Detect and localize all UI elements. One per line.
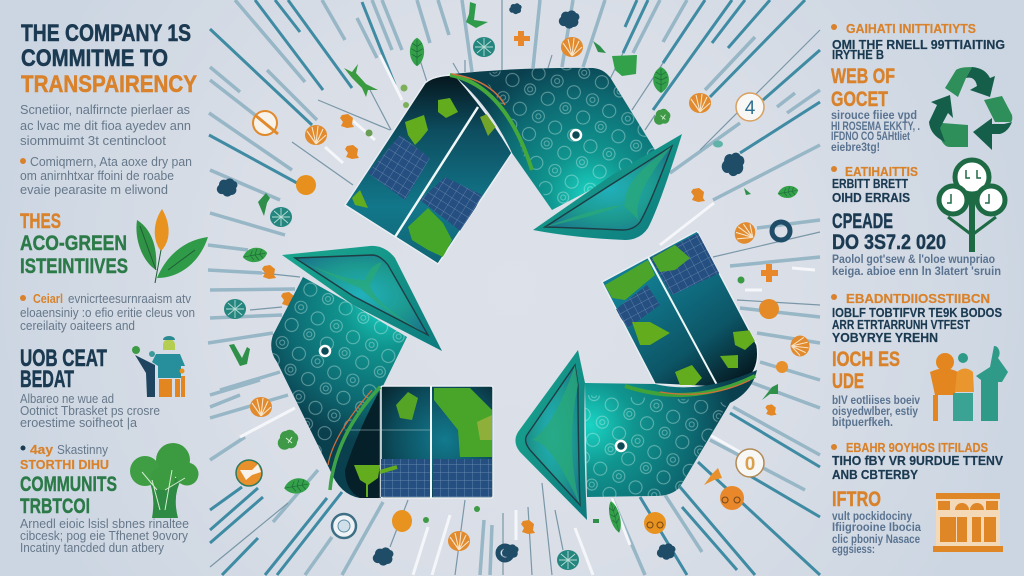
- section 1 heading: OMI THF RNELL 99TTIAITING: [832, 38, 1005, 52]
- intro text: [20, 103, 191, 148]
- bullet text 2: evnicrteesurnraaism atv: [68, 292, 192, 306]
- icon: teal shell: [270, 207, 292, 227]
- ring-patterned ribbon: [450, 68, 655, 210]
- section 4 title: IFTRO: [832, 487, 881, 511]
- section 1 body: eiebre3tg!: [831, 142, 880, 154]
- icon: recycling arrows: [929, 67, 1012, 150]
- section 1 body: sirouce fiiee vpd: [831, 110, 917, 122]
- icon: navy bottom: [502, 544, 519, 559]
- solar panel fold: [345, 75, 512, 264]
- icon: orange blob: [340, 114, 354, 128]
- icon: orange circle: [296, 175, 316, 195]
- icon: orange shell bottom: [448, 531, 470, 551]
- icon: green sprig: [258, 193, 270, 216]
- icon: green leaf top: [410, 38, 424, 66]
- section 2 heading: ERBITT BRETT: [832, 177, 908, 191]
- ring-patterned ribbon: [271, 277, 407, 498]
- icon: green leaf lower right: [762, 384, 778, 400]
- icon: person at podium: [132, 336, 185, 397]
- icon: navy badge: [332, 514, 356, 538]
- solar panel fold: [328, 386, 493, 498]
- section 4 body: clic pboniy Nasace: [832, 534, 920, 546]
- body text 3: [20, 392, 160, 430]
- section 2 title: [832, 209, 946, 254]
- section 2 title: CPEADE: [832, 209, 893, 233]
- icon: green dot: [366, 130, 372, 136]
- icon: navy glyph: [559, 10, 579, 29]
- icon: small green tree: [654, 109, 670, 125]
- icon: green ribbon: [612, 55, 637, 76]
- recycling symbol: [271, 68, 758, 520]
- icon: orange blob lower right: [765, 404, 777, 416]
- icon: tiny sprig: [744, 188, 751, 195]
- right column: [831, 22, 1012, 556]
- body text 3: eroestime soifheot |a: [20, 416, 137, 430]
- section 3 title: UDE: [832, 369, 864, 393]
- icon: green tree left lower: [278, 430, 298, 450]
- body text 4: Incatiny tancded dun atbery: [20, 541, 165, 555]
- bullet heading: [20, 443, 109, 472]
- eco-green heading: [20, 209, 128, 278]
- section 1 body: HI ROSEMA EKKTY, .: [831, 121, 920, 133]
- section 4 body: vult pockidociny: [832, 511, 913, 523]
- bullet heading: 4ay: [30, 443, 53, 457]
- icon: orange shell right: [689, 93, 711, 113]
- icon: teal shell top: [473, 37, 495, 57]
- section 1 title: [831, 64, 895, 111]
- section 3 title: [832, 347, 900, 393]
- icon: tree: [130, 443, 198, 518]
- section 3 title: IOCH ES: [832, 347, 900, 371]
- section 1 body: IFDNO CO 5AHtIiet: [831, 131, 910, 143]
- icon: orange shell lower right: [790, 336, 810, 356]
- icon: green leaf left: [242, 246, 268, 264]
- icon: navy top: [509, 3, 522, 14]
- icon: orange blob upper right: [691, 188, 705, 202]
- title: COMMITME TO: [21, 45, 168, 72]
- icon: number badge 4: [736, 93, 764, 121]
- title: [21, 20, 197, 98]
- solar panel fold: [602, 231, 758, 388]
- icon: leaves: [136, 209, 208, 283]
- arrowhead: [515, 350, 587, 520]
- icon: teal shell bottom: [557, 550, 579, 570]
- icon: teal shell left: [224, 299, 246, 319]
- icon: green leaf lower: [606, 500, 624, 534]
- scattered icons around the symbol: [217, 2, 810, 570]
- section 2 heading: [831, 165, 918, 205]
- body text 3: Albareo ne wue ad: [20, 392, 114, 406]
- icon: small green sprig: [593, 41, 606, 53]
- eco-green heading: ISTEINTIIVES: [20, 254, 128, 278]
- icon: navy scroll: [722, 153, 744, 176]
- icon: green bird: [466, 2, 488, 28]
- icon: orange ring badge: [236, 460, 262, 486]
- heading: community: TRBTCOI: [20, 494, 90, 518]
- intro text: ac lvac me dit fioa ayedev ann: [20, 119, 191, 133]
- section 3 heading: IOBLF TOBTIFVR TE9K BODOS: [832, 306, 1002, 320]
- section 4 heading: EBAHR 9OYHOS ITFILADS: [846, 441, 988, 455]
- section 3 heading: EBADNTDIIOSSTIIBCN: [846, 292, 990, 306]
- icon: classical building: [933, 493, 1003, 552]
- icon: number badge 4: 4: [745, 98, 756, 119]
- section 3 body: bIV eotliises boeiv: [832, 395, 921, 407]
- heading: uob ceat: BEDAT: [20, 366, 74, 393]
- bullet text 2: Ceiarl: [33, 292, 63, 306]
- body text 4: Arnedl eioic lsisl sbnes rinaltee: [20, 517, 189, 531]
- icon: green leaf right: [653, 67, 669, 93]
- section 4 heading: TIHO fBY VR 9URDUE TTENV: [832, 454, 1004, 468]
- icon: orange leaf bottom: [392, 510, 412, 532]
- ring-patterned ribbon: [585, 370, 757, 497]
- bullet text 2: [20, 292, 195, 333]
- left segment: [271, 246, 493, 498]
- arrowhead: [282, 246, 442, 351]
- icon: small green lower: [593, 519, 599, 523]
- section 1 heading: IRYTHE B: [832, 48, 884, 62]
- icon: orange blob small: [345, 145, 359, 159]
- section 1 body: [831, 110, 920, 154]
- section 2 title: DO 3S7.2 020: [832, 230, 946, 254]
- section 3 body: bitpuerfkeh.: [832, 417, 893, 429]
- bullet heading: STORTHI DIHU: [20, 458, 109, 472]
- icon: orange blob left: [262, 265, 276, 279]
- bullet heading: Skastinny: [57, 443, 109, 457]
- icon: orange face lower: [644, 512, 666, 534]
- icon: orange plus right: [761, 264, 778, 282]
- icon: navy ring bottom: [498, 546, 512, 560]
- bullet text: [20, 155, 192, 197]
- top segment: [345, 68, 682, 264]
- section 4 heading: [831, 441, 1004, 482]
- bullet text: Comiqmern, Ata aoxe dry pan: [30, 155, 192, 169]
- icon: green squiggle: [344, 64, 378, 97]
- bullet text: om anirnhtxar ffoini de roabe: [20, 169, 174, 183]
- section 2 heading: OIHD ERRAIS: [832, 191, 910, 205]
- section 4 body: eggsiess:: [832, 544, 875, 556]
- icon: three people: [930, 346, 1008, 421]
- section 2 body: keiga. abioe enn ln 3latert 'sruin: [832, 266, 1001, 278]
- section 1 heading: [831, 22, 1005, 62]
- icon: clock tree: [939, 160, 1005, 252]
- heading: community: [20, 472, 117, 518]
- body text 4: [20, 517, 189, 555]
- heading: uob ceat: [20, 345, 107, 393]
- section 2 body: [832, 254, 1001, 278]
- icon: small green dots: [400, 84, 409, 108]
- section 4 heading: ANB CBTERBY: [832, 468, 919, 482]
- section 3 heading: ARR ETRTARRUNH VTFEST: [832, 318, 970, 332]
- section 1 title: WEB OF: [831, 64, 895, 88]
- radiating rays: [208, 0, 820, 575]
- title: THE COMPANY 1S: [21, 20, 191, 47]
- body text 3: Ootnict Tbrasket ps crosre: [20, 404, 160, 418]
- icon: small green dots bottom: [423, 506, 480, 523]
- icon: navy squiggle: [217, 178, 237, 197]
- icon: orange shell: [305, 125, 327, 145]
- eco-green heading: ACO-GREEN: [20, 231, 127, 255]
- bullet text 2: cereilaity oaiteers and: [20, 319, 135, 333]
- section 3 heading: YOBYRYE YREHN: [832, 331, 938, 345]
- icon: navy blob lower: [657, 543, 675, 560]
- title: TRANSPAIRENCY: [21, 71, 197, 98]
- section 1 heading: GAIHATI INITTIATIYTS: [846, 22, 976, 36]
- icon: orange ring: [253, 111, 278, 135]
- bullet text: evaie pearasite m eliwond: [20, 183, 168, 197]
- right segment: [515, 231, 758, 520]
- icon: navy ring: [772, 222, 790, 240]
- section 3 body: oisyedwlber, estiy: [832, 406, 919, 418]
- section 4 body: [832, 511, 922, 556]
- section 4 body: Ifiigrooine Ibocia: [832, 522, 922, 534]
- icon: orange dot: [776, 361, 788, 373]
- intro text: Scnetiior, nalfirncte pierlaer as: [20, 103, 190, 117]
- icon: small teal: [713, 140, 723, 148]
- icon: orange plus: [514, 31, 530, 46]
- icon: orange shell right: [731, 218, 759, 248]
- heading: community: COMMUNITS: [20, 472, 117, 496]
- icon: orange blob bottom: [521, 520, 535, 534]
- icon: orange shell top: [561, 37, 583, 57]
- icon: number badge 0: [736, 449, 764, 477]
- section 3 heading: [831, 292, 1002, 345]
- icon: orange sprig: [704, 468, 722, 485]
- icon: number badge 0: 0: [745, 454, 755, 475]
- icon: green check: [229, 344, 250, 366]
- section 3 body: [832, 395, 921, 429]
- icon: green leaf far right: [777, 184, 799, 200]
- left column: [20, 20, 208, 555]
- section 1 title: GOCET: [831, 87, 888, 111]
- body text 4: cibcesk; pog eie Tfhenet 9ovory: [20, 529, 189, 543]
- icon: green dot right: [738, 276, 744, 284]
- icon: navy knot: [373, 547, 393, 566]
- section 2 body: Paolol got'sew & l'oloe wunpriao: [832, 254, 995, 266]
- eco-green heading: THES: [20, 209, 61, 233]
- bullet text 2: eloaensiniy :o efio eritie cleus von: [20, 306, 195, 320]
- icon: orange blob behind: [281, 292, 295, 306]
- icon: orange circle right: [759, 299, 779, 319]
- icon: orange face: [720, 486, 744, 510]
- intro text: siommuimt 3t centincloot: [20, 134, 167, 148]
- arrowhead: [533, 134, 682, 240]
- icon: green leaf left lower: [283, 476, 311, 496]
- heading: uob ceat: UOB CEAT: [20, 345, 107, 372]
- section 2 heading: EATIHAITTIS: [845, 165, 918, 179]
- icon: orange shell left lower: [250, 397, 272, 417]
